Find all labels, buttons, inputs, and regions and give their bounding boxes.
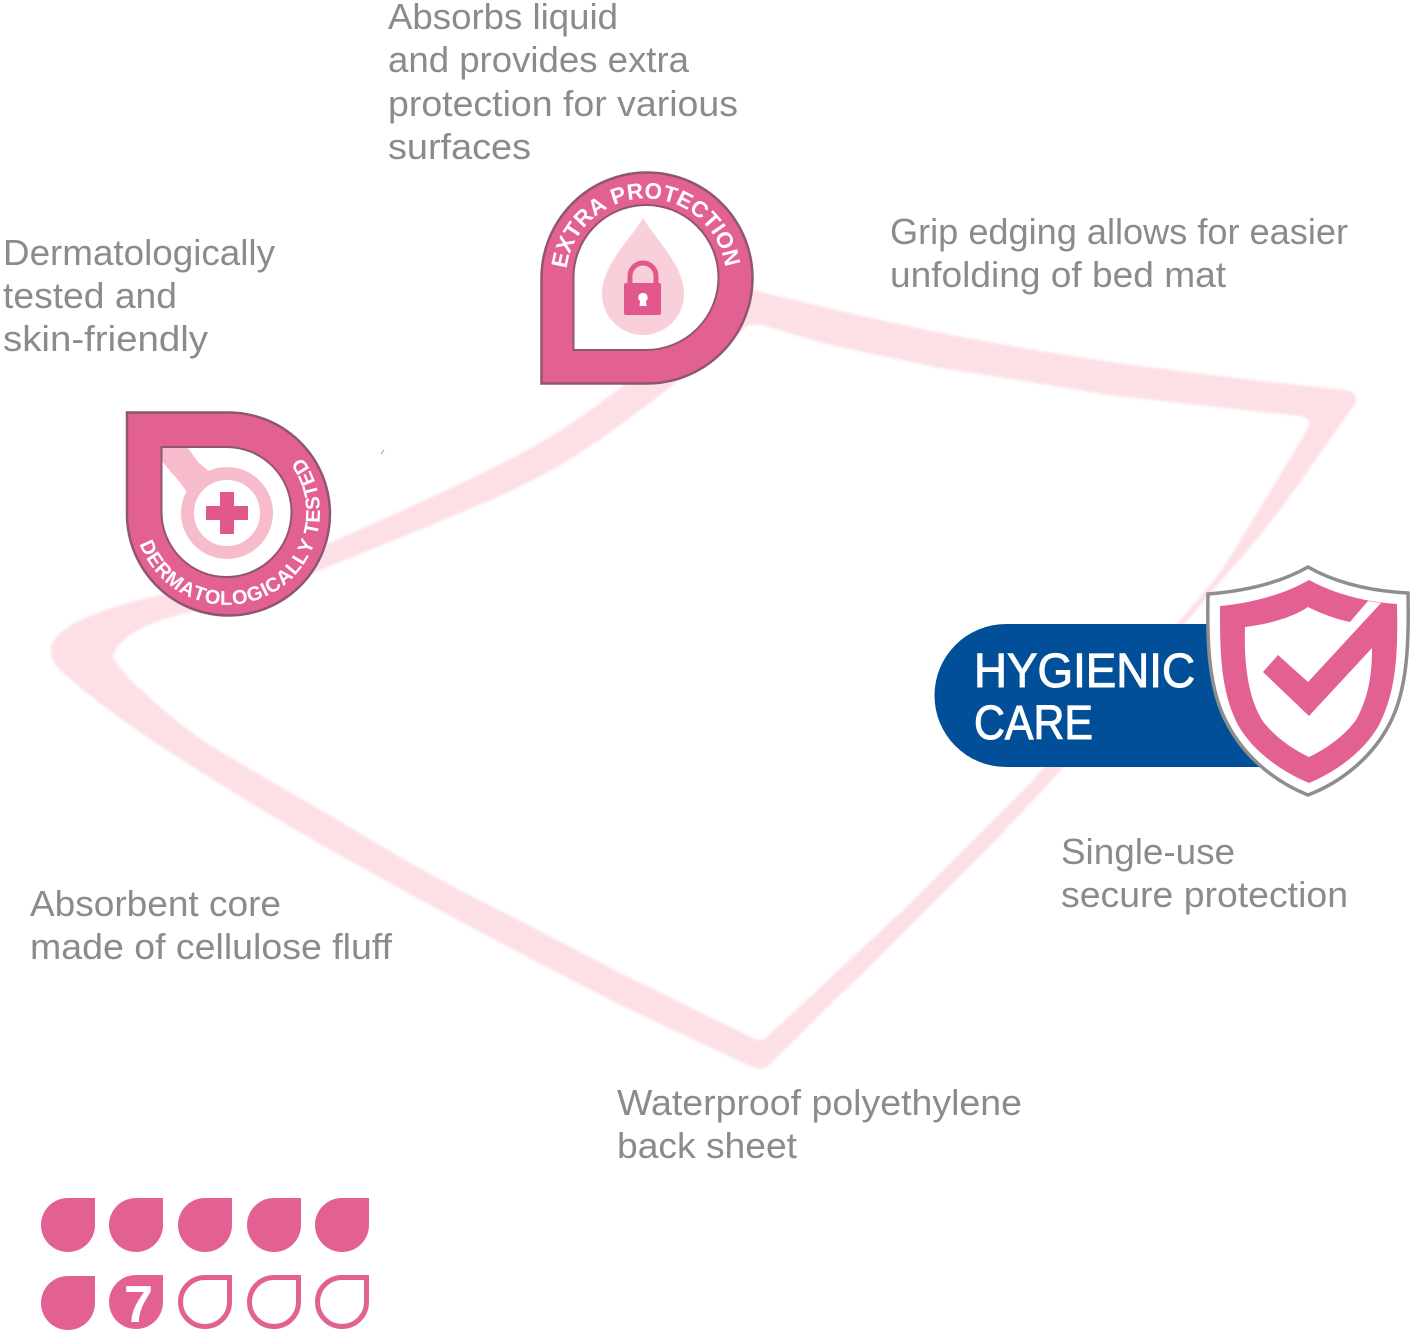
label: [974, 645, 1195, 750]
drop 2: [109, 1198, 163, 1252]
text: absorbs liquid: [388, 0, 738, 167]
text: grip edging: Grip edging allows for easier: [890, 211, 1348, 252]
text: single-use protection: Single-use: [1061, 831, 1235, 872]
text: absorbent core: Absorbent core: [30, 883, 281, 924]
badge: hygienic care: [934, 567, 1408, 795]
text: waterproof back sheet: Waterproof polyethylene: [617, 1082, 1022, 1123]
text: dermatologically tested: [3, 232, 275, 359]
speck: [381, 450, 384, 454]
absorbency scale: [41, 1198, 369, 1333]
bed mat outline: [51, 290, 1356, 1069]
text: waterproof back sheet: back sheet: [617, 1125, 797, 1166]
text: absorbs liquid: and provides extra: [388, 39, 690, 80]
text: waterproof back sheet: [617, 1082, 1022, 1166]
text: dermatologically tested: tested and: [3, 275, 177, 316]
drop 1: [41, 1198, 95, 1252]
text: dermatologically tested: skin-friendly: [3, 318, 208, 359]
drop 7 with number: 7: [124, 1276, 153, 1333]
label: HYGIENIC: [974, 645, 1195, 698]
label: CARE: [974, 697, 1093, 750]
drop 5: [315, 1198, 369, 1252]
text: single-use protection: secure protection: [1061, 874, 1348, 915]
drop 4: [247, 1198, 301, 1252]
text: absorbs liquid: protection for various: [388, 83, 738, 124]
drop 3: [178, 1198, 232, 1252]
text: dermatologically tested: Dermatologically: [3, 232, 275, 273]
badge: dermatologically tested: [126, 411, 332, 617]
text: grip edging: unfolding of bed mat: [890, 254, 1226, 295]
pill: [934, 624, 1275, 767]
drop 6: [41, 1276, 95, 1330]
text: absorbent core: [30, 883, 393, 967]
text: absorbent core: made of cellulose fluff: [30, 926, 393, 967]
text: grip edging: [890, 211, 1348, 295]
drop 10: [318, 1278, 366, 1326]
badge label: EXTRA PROTECTION: [552, 183, 740, 268]
drop 7 with number: [109, 1275, 163, 1333]
icon: droplet with padlock: [602, 218, 684, 335]
drop 8: [180, 1278, 230, 1326]
text: single-use protection: [1061, 831, 1348, 915]
text: absorbs liquid: surfaces: [388, 126, 531, 167]
icon: droplet ring with cross: [162, 448, 266, 552]
icon: shield with check: [1208, 567, 1408, 795]
drop 9: [249, 1278, 298, 1326]
badge label: DERMATOLOGICALLY TESTED: [140, 460, 320, 605]
badge: extra protection: [540, 171, 754, 385]
